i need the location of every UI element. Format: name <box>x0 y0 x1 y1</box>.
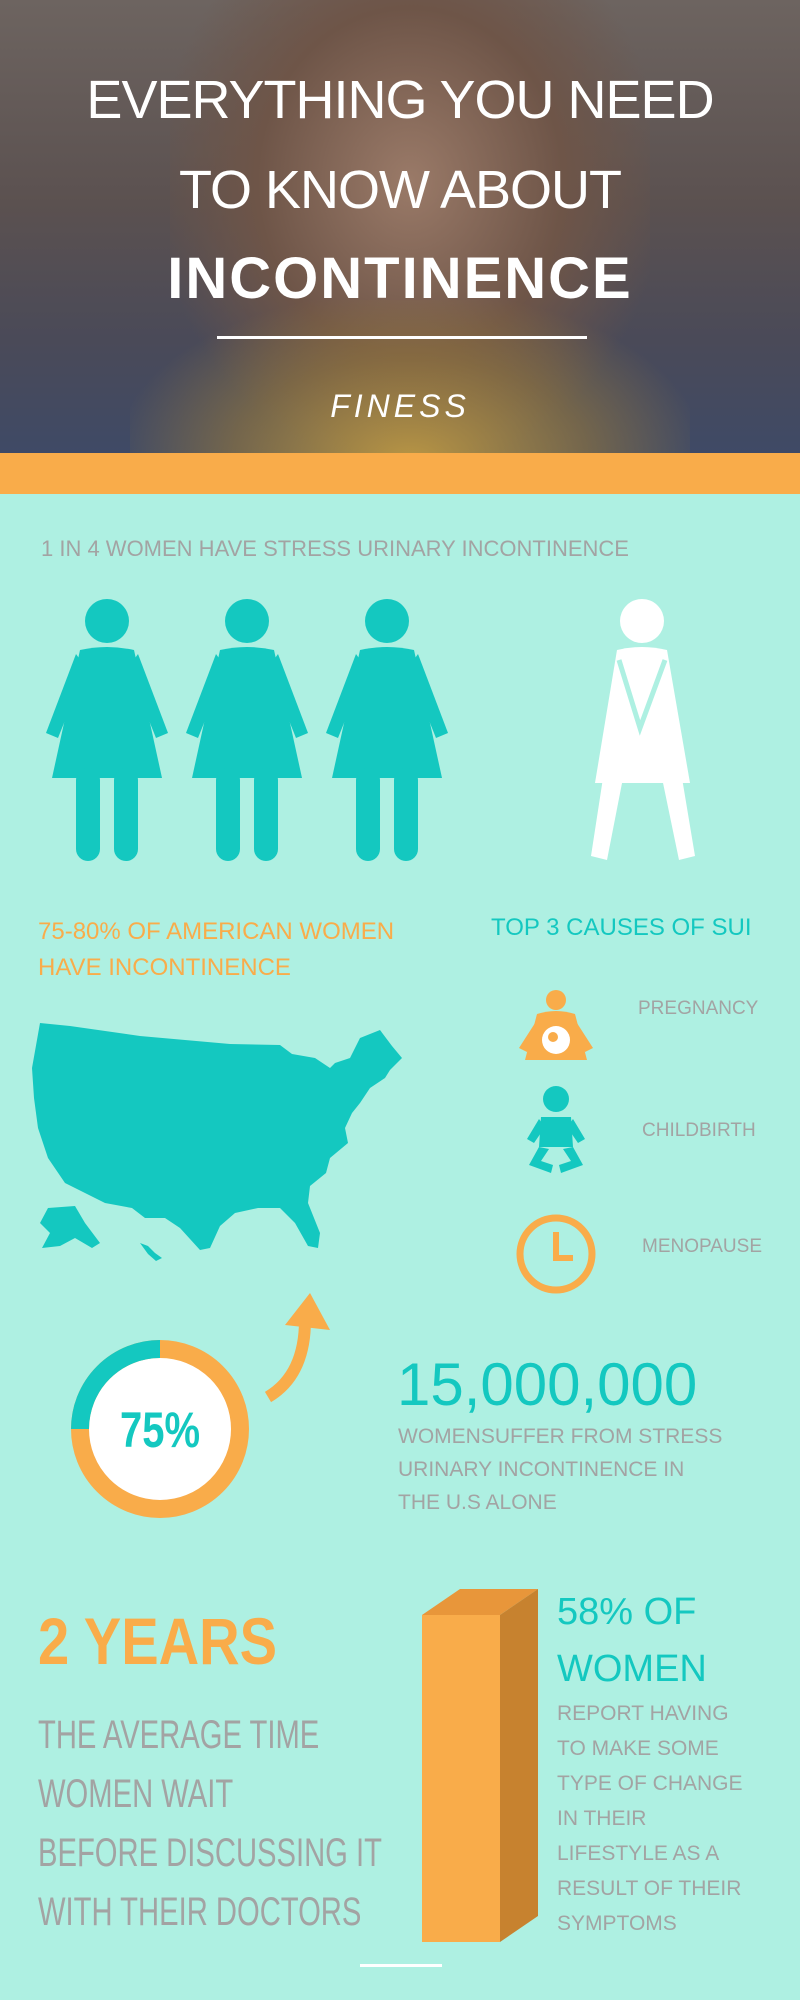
map: USA <box>32 1023 402 1261</box>
stat: 15,000,000: 15,000,000 <box>397 1351 697 1418</box>
donut chart 75% <box>71 1340 249 1518</box>
text: average wait: WOMEN WAIT <box>38 1772 233 1816</box>
heading: 75-80%: 75-80% OF AMERICAN WOMEN <box>38 918 394 945</box>
stat: 58% of women <box>557 1591 707 1690</box>
stat: 2 years: 2 YEARS <box>38 1604 277 1678</box>
header photo <box>0 0 800 453</box>
cause: pregnancy <box>519 990 758 1060</box>
text: lifestyle change: TO MAKE SOME <box>557 1737 719 1760</box>
stat: 58% of women: WOMEN <box>557 1648 707 1690</box>
text: average wait <box>38 1713 382 1934</box>
text: lifestyle change: IN THEIR <box>557 1807 646 1830</box>
3d bar <box>422 1589 538 1942</box>
cause: childbirth <box>527 1086 756 1173</box>
photo figure <box>170 0 650 453</box>
text: average wait: WITH THEIR DOCTORS <box>38 1890 361 1934</box>
text: lifestyle change <box>557 1702 743 1935</box>
cause: menopause: MENOPAUSE <box>642 1236 762 1257</box>
orange band <box>0 453 800 494</box>
text: lifestyle change: LIFESTYLE AS A <box>557 1842 719 1865</box>
title: EVERYTHING YOU NEED <box>86 70 714 130</box>
text: average wait: BEFORE DISCUSSING IT <box>38 1831 382 1875</box>
text: women suffer: WOMENSUFFER FROM STRESS <box>398 1425 722 1448</box>
text: women suffer: THE U.S ALONE <box>398 1491 557 1514</box>
heading: 1 in 4: 1 IN 4 WOMEN HAVE STRESS URINARY INCONTINENCE <box>41 536 629 561</box>
title: INCONTINENCE <box>167 246 633 311</box>
heading: top 3 causes: TOP 3 CAUSES OF SUI <box>491 914 752 941</box>
text: women suffer <box>398 1425 722 1514</box>
cause: menopause <box>516 1214 762 1294</box>
title: TO KNOW ABOUT <box>179 160 621 220</box>
heading: 75-80% <box>38 918 394 981</box>
stat: 58% of women: 58% OF <box>557 1591 696 1633</box>
icon: three teal women <box>46 599 448 861</box>
heading: 75-80%: HAVE INCONTINENCE <box>38 954 291 981</box>
title <box>86 70 714 311</box>
text: lifestyle change: REPORT HAVING <box>557 1702 729 1725</box>
text: lifestyle change: TYPE OF CHANGE <box>557 1772 743 1795</box>
text: average wait: THE AVERAGE TIME <box>38 1713 319 1757</box>
donut chart 75%: 75% <box>120 1402 200 1458</box>
text: lifestyle change: RESULT OF THEIR <box>557 1877 741 1900</box>
text: lifestyle change: SYMPTOMS <box>557 1912 677 1935</box>
logo: FINESS <box>330 388 470 424</box>
arrow <box>265 1293 330 1402</box>
cause: pregnancy: PREGNANCY <box>638 998 758 1019</box>
text: women suffer: URINARY INCONTINENCE IN <box>398 1458 684 1481</box>
cause: childbirth: CHILDBIRTH <box>642 1120 756 1141</box>
icon: white woman crossing legs <box>591 599 695 860</box>
